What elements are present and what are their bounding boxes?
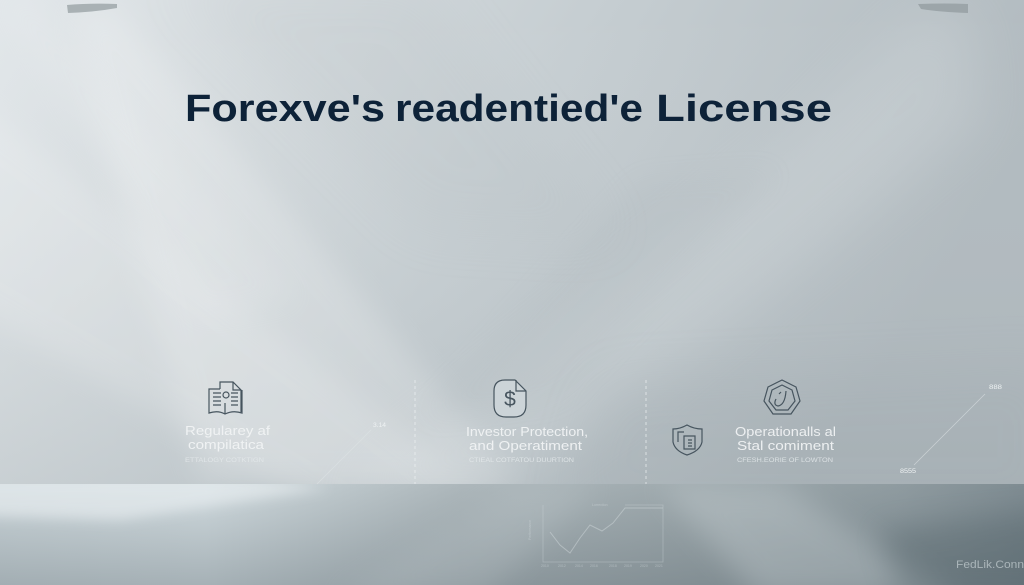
line chart: Lorrextion [592, 503, 608, 507]
line chart: Performance [528, 520, 532, 540]
line chart: 2014 [575, 564, 583, 568]
column caption: CFESH.EORIE OF LOWTON [737, 457, 833, 464]
title [185, 88, 832, 130]
column heading: and Operatiment [469, 438, 582, 453]
column heading [185, 423, 270, 452]
diagonal marker: right: 8555 [900, 468, 916, 475]
divider: right [645, 380, 647, 484]
column heading: Operationalls al [735, 424, 836, 439]
ceiling lamp: left [67, 4, 117, 13]
line chart: 2021 [655, 564, 663, 568]
divider: left [414, 380, 416, 484]
line chart: 2019 [624, 564, 632, 568]
line chart: 2020 [640, 564, 648, 568]
title: Forexve's [185, 88, 385, 130]
column heading: Investor Protection, [466, 424, 588, 439]
column heading [735, 424, 836, 453]
diagonal marker: left: 3.14 [373, 422, 386, 429]
ceiling lamp: right [918, 4, 968, 13]
column caption: CTIEAL COTFATOU DUURTION [469, 457, 574, 464]
column: regulatory compliance [185, 382, 270, 464]
diagonal marker: right [900, 384, 1002, 475]
icon: shield with documents [673, 425, 702, 455]
line chart [528, 503, 663, 568]
footer brand: FedLik.Conn [956, 559, 1024, 571]
icon: document and open book [209, 382, 242, 414]
column: investor protection [466, 380, 588, 464]
title: readentied'e [395, 88, 643, 130]
column caption: ETTALOGY COTKTIGN [185, 457, 264, 464]
title: License [656, 88, 832, 130]
line chart: 2016 [590, 564, 598, 568]
line chart: 2010 [541, 564, 549, 568]
column heading: compilatica [188, 437, 265, 452]
diagonal marker: left [317, 422, 386, 484]
line chart: 2018 [609, 564, 617, 568]
floor band [0, 478, 1024, 585]
column heading [466, 424, 588, 453]
icon: dollar document: $ [504, 388, 516, 411]
line chart: 2012 [558, 564, 566, 568]
diagonal marker: right: 888 [989, 384, 1002, 391]
column: operational commitment [673, 380, 836, 464]
icon: heptagon seal [764, 380, 800, 414]
column heading: Stal comiment [737, 438, 834, 453]
column heading: Regularey af [185, 423, 270, 438]
